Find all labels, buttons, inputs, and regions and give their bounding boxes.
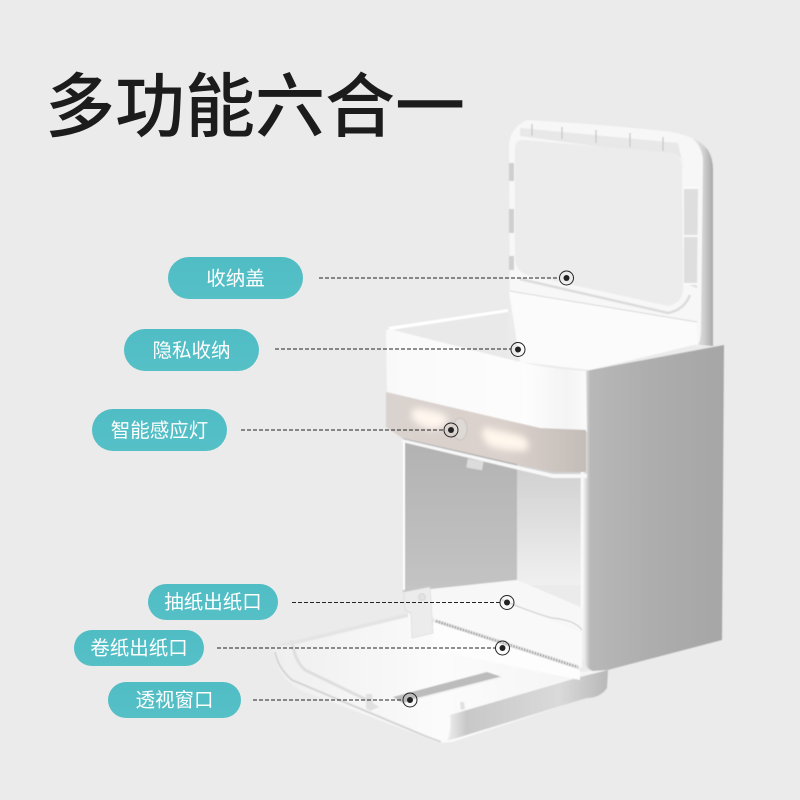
- lid: storage cover: [509, 120, 713, 346]
- pill: 卷纸出纸口: 卷纸出纸口: [90, 638, 188, 660]
- pill: 卷纸出纸口: [74, 630, 204, 666]
- callout: 卷纸出纸口: [74, 630, 510, 666]
- pill: 透视窗口: 透视窗口: [135, 690, 214, 712]
- pill: 智能感应灯: 智能感应灯: [111, 420, 208, 442]
- front door opened: [273, 613, 608, 743]
- product: tissue box illustration: [273, 120, 724, 743]
- leader line and marker: [253, 693, 417, 707]
- pill: 隐私收纳: 隐私收纳: [152, 340, 231, 362]
- pill: 收纳盖: [168, 257, 303, 299]
- leader line and marker: [275, 342, 525, 356]
- callout: 隐私收纳: [124, 329, 525, 371]
- door clips: [366, 694, 465, 711]
- leader line and marker: [241, 423, 458, 437]
- pill: 抽纸出纸口: [148, 584, 278, 620]
- body right side panel: [580, 345, 724, 672]
- leader line and marker: [292, 596, 514, 610]
- paper shelf with serrated edge: [426, 599, 582, 680]
- smart sensor light strip: [386, 392, 587, 478]
- pill: 透视窗口: [108, 682, 241, 718]
- leader line and marker: [217, 641, 510, 655]
- callout: 收纳盖: [168, 257, 574, 299]
- callout: 抽纸出纸口: [148, 584, 514, 620]
- hinge: [404, 587, 433, 638]
- callout: 智能感应灯: [92, 409, 458, 451]
- see-through window: [393, 672, 502, 703]
- title: 多功能六合一: [45, 68, 465, 146]
- cabinet interior: [403, 438, 583, 632]
- pill: 抽纸出纸口: 抽纸出纸口: [164, 592, 262, 614]
- pill: 智能感应灯: [92, 409, 227, 451]
- storage tray: [386, 290, 698, 432]
- pill: 收纳盖: 收纳盖: [206, 268, 265, 290]
- callout: 透视窗口: [108, 682, 417, 718]
- leader line and marker: [319, 271, 574, 285]
- pill: 隐私收纳: [124, 329, 259, 371]
